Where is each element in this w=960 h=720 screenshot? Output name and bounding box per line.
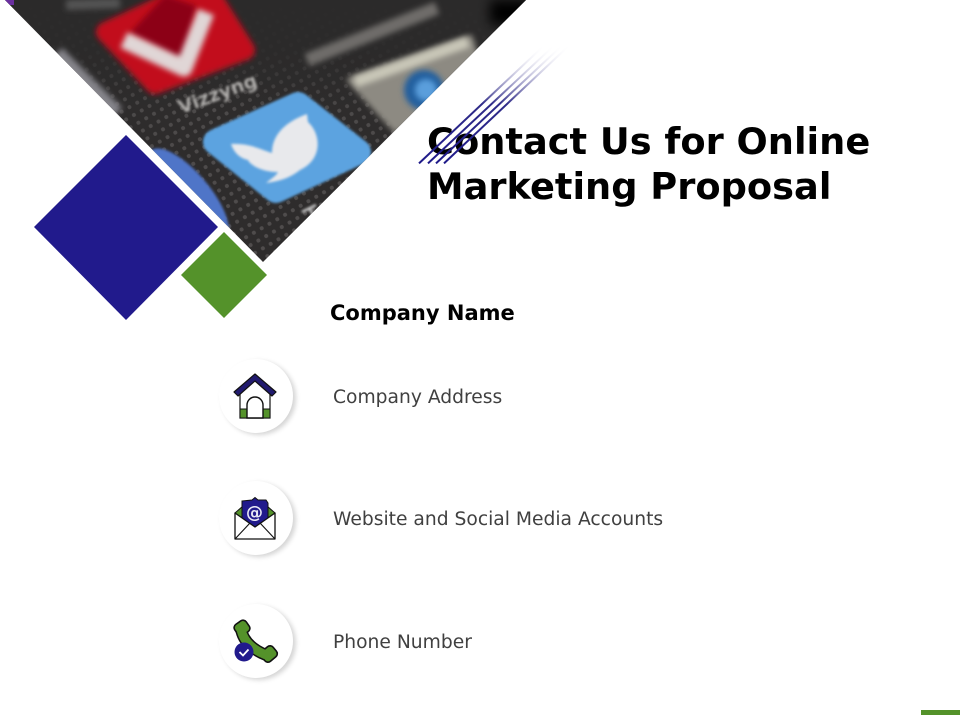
blurred app captions bbox=[307, 8, 437, 60]
address icon circle bbox=[219, 359, 293, 433]
phone text: Phone Number bbox=[333, 632, 472, 653]
red app icon bbox=[106, 0, 245, 84]
title: Contact Us for Online bbox=[427, 120, 870, 163]
icon: envelope with at sign bbox=[234, 496, 276, 540]
web icon circle bbox=[219, 481, 293, 555]
phone row bbox=[226, 604, 298, 682]
icon: phone with check badge bbox=[233, 619, 278, 663]
photo diamond: phone app icons bbox=[5, 0, 526, 262]
corner accent bar bbox=[921, 710, 960, 715]
web text: Website and Social Media Accounts bbox=[333, 509, 663, 530]
address text: Company Address bbox=[333, 387, 502, 408]
address row bbox=[226, 360, 298, 437]
icon: house bbox=[233, 373, 277, 419]
title: Marketing Proposal bbox=[427, 165, 831, 208]
phone icon circle bbox=[219, 604, 293, 678]
partly hidden blue app bbox=[151, 146, 231, 229]
web row bbox=[226, 482, 298, 559]
title bbox=[427, 120, 870, 208]
photo diamond: phone app icons: Vizzyng bbox=[175, 70, 260, 119]
company name heading: Company Name bbox=[330, 301, 515, 325]
grey app icon bbox=[350, 38, 480, 130]
twitter app icon bbox=[216, 105, 358, 190]
icon: envelope with at sign: @ bbox=[246, 503, 263, 523]
